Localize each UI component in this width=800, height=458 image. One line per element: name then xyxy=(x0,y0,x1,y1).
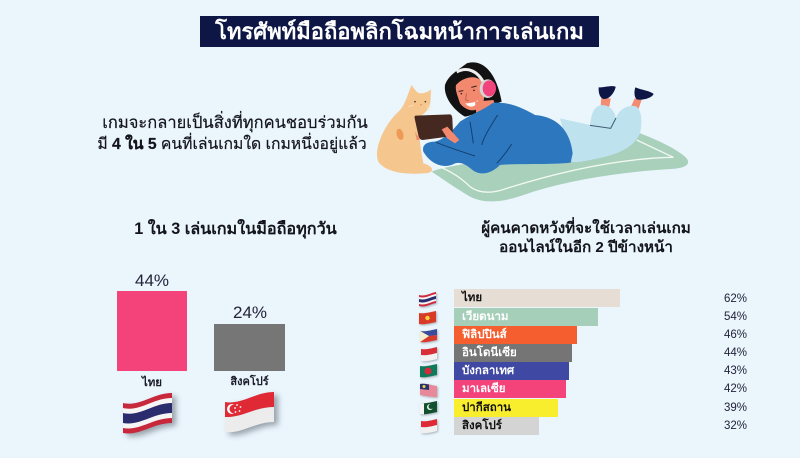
row Indonesia xyxy=(454,344,572,362)
flag: Indonesia xyxy=(421,347,437,361)
row Singapore: สิงคโปร์ xyxy=(462,420,502,432)
woman body sweater xyxy=(423,103,573,173)
title: โทรศัพท์มือถือพลิกโฉมหน้าการเล่นเกม xyxy=(215,19,584,44)
left chart heading: 1 ใน 3 เล่นเกมในมือถือทุกวัน xyxy=(134,220,337,238)
flag: Malaysia xyxy=(420,384,437,397)
row Vietnam xyxy=(454,308,598,326)
tablet and hand xyxy=(415,114,459,143)
right chart heading: ผู้คนคาดหวังที่จะใช้เวลาเล่นเกม xyxy=(481,220,691,237)
flag: Singapore large xyxy=(225,392,282,439)
bar chart: daily mobile gaming xyxy=(117,271,285,389)
value 32%: 32% xyxy=(724,420,747,432)
label Thailand: ไทย xyxy=(142,377,162,389)
flag: Singapore xyxy=(421,419,437,433)
row Indonesia: อินโดนีเซีย xyxy=(462,347,517,359)
value 46%: 46% xyxy=(724,328,747,340)
flag: Thailand xyxy=(419,292,436,307)
intro text: เกมจะกลายเป็นสิ่งที่ทุกคนชอบร่วมกัน xyxy=(102,114,368,132)
bar Singapore xyxy=(214,324,285,371)
row Bangladesh: บังกลาเทศ xyxy=(462,365,514,377)
right chart heading xyxy=(481,217,691,256)
row Pakistan: ปากีสถาน xyxy=(462,402,511,414)
row Singapore xyxy=(454,416,539,434)
row Vietnam: เวียดนาม xyxy=(462,310,508,322)
flag: Philippines xyxy=(420,329,437,342)
row Malaysia: มาเลเซีย xyxy=(462,383,506,395)
cat xyxy=(377,85,432,174)
value 44%: 44% xyxy=(135,271,169,290)
flag: Bangladesh xyxy=(420,364,437,377)
value 24%: 24% xyxy=(233,303,267,322)
flag: Vietnam xyxy=(419,311,436,324)
label Singapore: สิงคโปร์ xyxy=(230,376,269,388)
row Philippines xyxy=(454,326,577,344)
flag: Pakistan xyxy=(420,401,437,414)
woman legs xyxy=(560,86,654,162)
value 62%: 62% xyxy=(724,293,747,305)
value 39%: 39% xyxy=(724,402,747,414)
intro text xyxy=(97,110,368,154)
row Thailand: ไทย xyxy=(462,292,482,304)
bar Thailand xyxy=(117,291,187,371)
row Bangladesh xyxy=(454,362,569,380)
value 54%: 54% xyxy=(724,310,747,322)
value 43%: 43% xyxy=(724,365,747,377)
row Malaysia xyxy=(454,380,566,398)
row Philippines: ฟิลิปปินส์ xyxy=(462,328,507,340)
value 44%: 44% xyxy=(724,347,747,359)
intro text: มี 4 ใน 5 คนที่เล่นเกมใด เกมหนึ่งอยู่แล้ว xyxy=(97,136,367,153)
row Thailand xyxy=(454,289,620,307)
woman hair and face xyxy=(445,62,502,117)
small flags column xyxy=(418,292,440,436)
illustration: woman and cat on mat xyxy=(377,62,688,202)
mat xyxy=(428,133,688,201)
value 42%: 42% xyxy=(724,383,747,395)
row Pakistan xyxy=(454,398,558,416)
flag: Thailand large xyxy=(123,392,180,440)
right chart heading: ออนไลน์ในอีก 2 ปีข้างหน้า xyxy=(499,239,673,256)
